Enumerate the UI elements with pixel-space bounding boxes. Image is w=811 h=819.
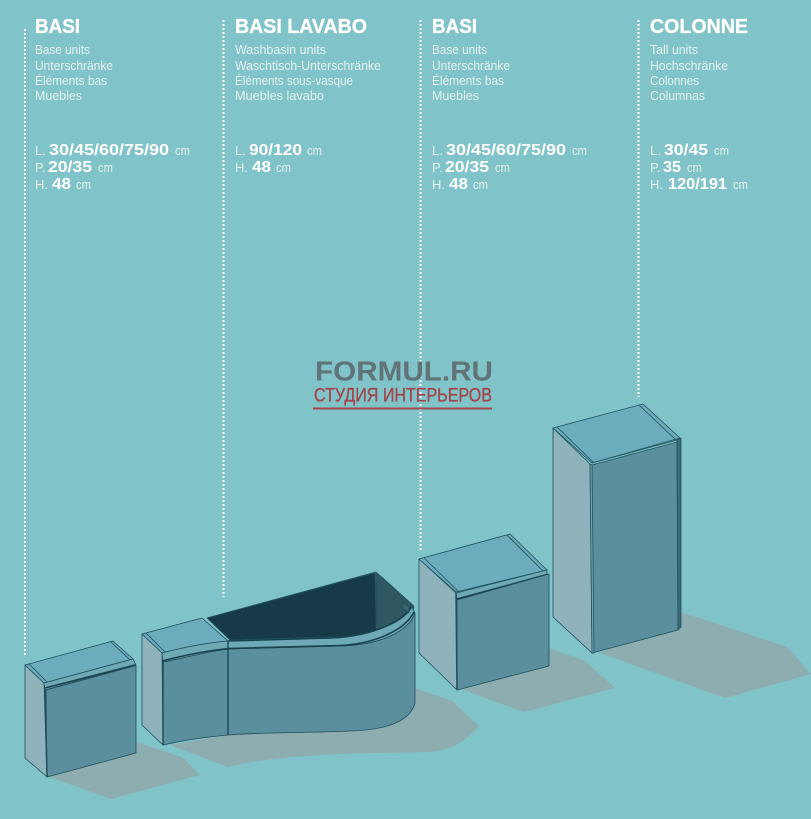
cabinet: medium base unit [419,534,549,690]
column: basi right: 48 [449,176,468,193]
column: basi right: cm [495,160,510,175]
column: basi lavabo: cm [276,160,291,175]
column: colonne: Tall units [650,42,698,57]
column: basi left: 30/45/60/75/90 [49,142,169,159]
watermark [313,356,493,410]
cabinet: small base unit [25,641,136,777]
column: basi left: cm [98,160,113,175]
column: basi lavabo: Éléments sous-vasque [235,73,353,88]
column: basi right: Éléments bas [432,73,504,88]
column: colonne: cm [687,160,702,175]
column: basi left: P. [35,160,46,175]
column: basi lavabo: Washbasin units [235,42,326,57]
column: basi lavabo: 90/120 [249,142,302,159]
column: basi left: BASI [35,16,80,38]
column: basi right: L. [432,143,443,158]
column: colonne: cm [733,177,748,192]
dotted guide lines [25,20,638,655]
column: basi lavabo: BASI LAVABO [235,16,367,38]
column: basi right: Unterschränke [432,58,510,73]
column: colonne: Hochschränke [650,58,728,73]
column: basi right: H. [432,177,445,192]
cabinet: curved washbasin unit [142,572,415,745]
column: basi right: P. [432,160,443,175]
column: basi right: cm [473,177,488,192]
column: colonne: COLONNE [650,16,748,38]
column: colonne: Columnas [650,88,705,103]
column: basi left: Unterschränke [35,58,113,73]
column: basi left: 48 [52,176,71,193]
column: colonne: 35 [663,159,681,176]
column: basi left: 20/35 [48,159,92,176]
column: colonne: L. [650,143,661,158]
column: basi left: L. [35,143,46,158]
column: basi left: Muebles [35,88,82,103]
column: basi right: cm [572,143,587,158]
column: basi lavabo: Muebles lavabo [235,88,324,103]
column: colonne: 30/45 [664,142,708,159]
column: basi lavabo [235,16,381,176]
column: basi left: cm [175,143,190,158]
column: basi right: Base units [432,42,487,57]
cabinet: tall column unit [553,404,681,653]
column: basi right: 20/35 [445,159,489,176]
column: basi lavabo: L. [235,143,246,158]
column: colonne: P. [650,160,661,175]
column: basi lavabo: cm [307,143,322,158]
column: colonne: Colonnes [650,73,699,88]
column: basi right: 30/45/60/75/90 [446,142,566,159]
column: basi right: BASI [432,16,477,38]
column: basi left [35,16,190,193]
column: basi right: Muebles [432,88,479,103]
column: colonne: 120/191 [668,176,727,193]
column: basi right [432,16,587,193]
column: basi lavabo: 48 [252,159,271,176]
column: basi left: Base units [35,42,90,57]
column: basi lavabo: Waschtisch-Unterschränke [235,58,381,73]
column: colonne [650,16,748,193]
column: colonne: H. [650,177,663,192]
watermark: FORMUL.RU [315,356,493,386]
column: basi left: Éléments bas [35,73,107,88]
column: colonne: cm [714,143,729,158]
watermark: СТУДИЯ ИНТЕРЬЕРОВ [314,386,492,406]
shadows under cabinets [50,612,811,799]
column: basi left: cm [76,177,91,192]
column: basi lavabo: H. [235,160,248,175]
column: basi left: H. [35,177,48,192]
